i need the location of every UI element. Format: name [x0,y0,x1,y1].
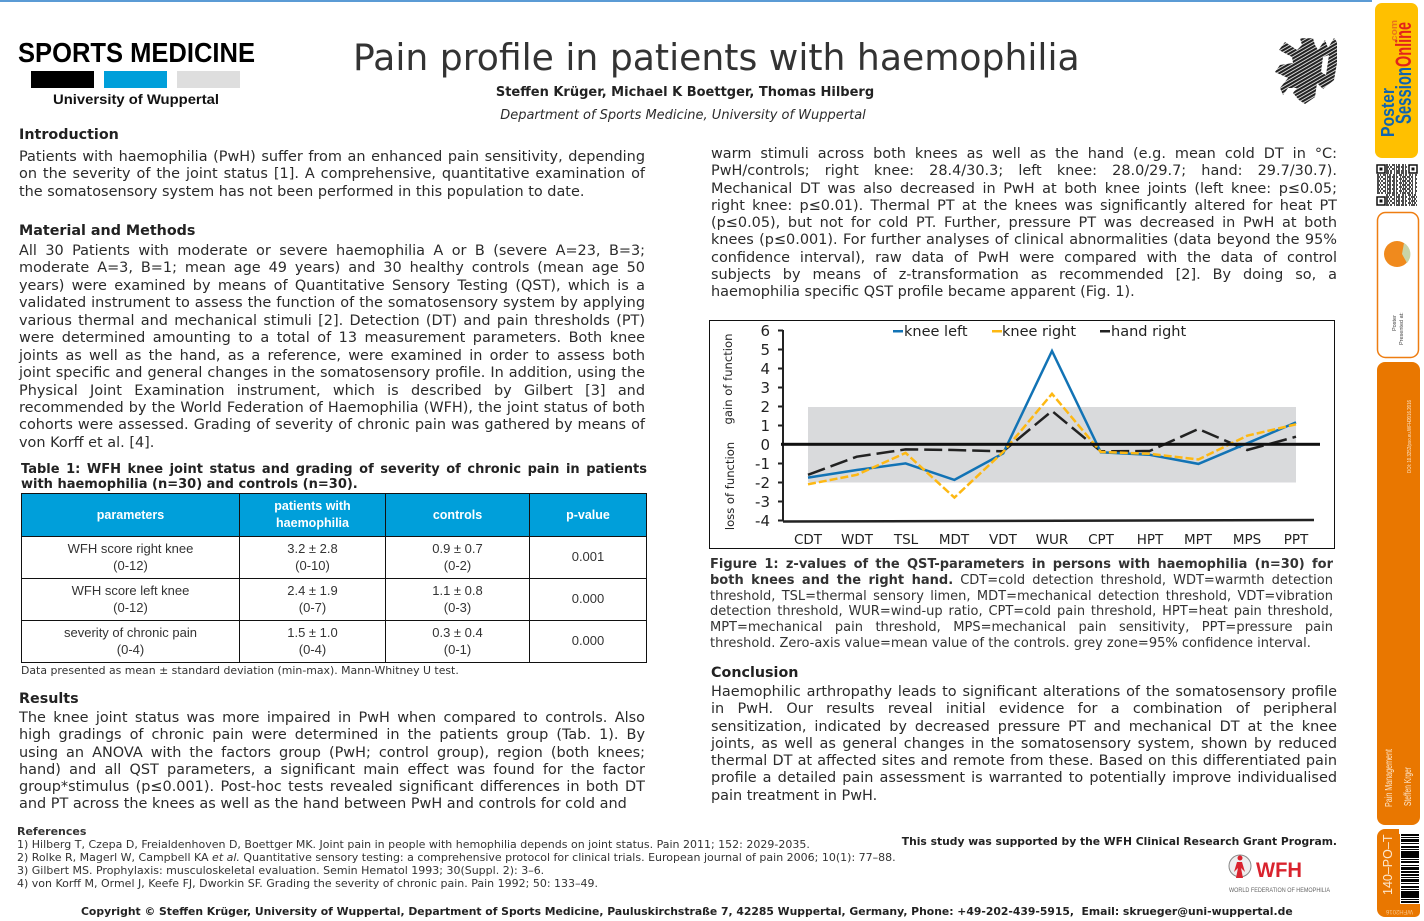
department: Department of Sports Medicine, University of Wuppertal [500,108,866,123]
sidebar: poster id and barcode: 140–PO–T [1381,834,1395,895]
axis titles [721,334,737,530]
table 1: WFH score left knee [72,582,189,598]
funding note: This study was supported by the WFH Clinical Research Grant Program. [902,835,1337,848]
y axis tick labels: 1 [760,417,770,435]
icon: university lion crest [1275,38,1337,104]
table caption: with haemophilia (n=30) and controls (n=30). [21,476,358,492]
table 1: (0-1) [444,642,471,656]
text: results continued: PwH/controls; right knee: 28.4/30.3; left knee: 28.0/29.7; hand: 29.7/30.7). [711,163,1337,179]
table 1: (0-4) [299,642,326,656]
table 1: severity of chronic pain [64,624,197,640]
text: results continued: right knee: p≤0.01). Thermal PT at the knees was significantly altered for heat PT [711,198,1337,214]
doi text: DOI: 10.3252/pso.eu.WFH2016.2016 [1407,400,1413,473]
figure caption: both knees and the right hand. CDT=cold detection threshold, WDT=warmth detection [710,573,1333,588]
x axis labels: CDT [794,532,823,548]
x axis line [783,520,1314,522]
table 1: 1.1 ± 0.8 [432,582,483,598]
text: results continued: haemophilia specific QST profile became apparent (Fig. 1). [711,284,1135,300]
table 1: haemophilia [276,516,349,530]
y axis tick labels: -2 [755,474,770,492]
text: methods: All 30 Patients with moderate or severe haemophilia A or B (severe A=23, B=3; [19,243,645,259]
sidebar: poster id and barcode [1377,829,1420,917]
y axis [778,330,783,521]
y axis tick labels: 4 [760,360,770,378]
x axis labels: VDT [989,532,1018,548]
text: methods: various thermal and mechanical stimuli [2]. Detection (DT) and pain thresholds (PT) [19,313,645,329]
text: results continued: subjects by means of z-transformation as recommended [2]. By doing so, a [711,267,1337,283]
references [17,825,896,890]
table 1: p-value [566,508,610,522]
table 1: 1.5 ± 1.0 [287,624,338,640]
title: Pain profile in patients with haemophilia [353,36,1080,79]
text: conclusion: sensitization, indicated by decreased pressure PT and mechanical DT at the knee [711,719,1337,735]
line chart: z-values of QST parameters [709,320,1335,549]
text: results continued: knees (p≤0.001). For further analyses of clinical abnormalities (data beyond the 95% [711,232,1337,248]
table 1: 0.001 [572,549,604,564]
topic: Pain Management [1384,749,1395,807]
sidebar: presented at panel: Poster [1392,315,1398,331]
text: results continued: Mechanical DT was also decreased in PwH at both knee joints (left knee: p≤0.05; [711,181,1337,197]
axis titles: gain of function [721,334,735,424]
table 1: parameters [97,508,164,522]
text: results: The knee joint status was more impaired in PwH when compared to controls. Also [19,710,645,726]
sidebar: poster session online logo: Poster [1378,88,1398,137]
table caption [21,462,647,492]
text: results: group*stimulus (p≤0.001). Post-hoc tests revealed significant differences in both DT [19,779,645,795]
x axis labels: HPT [1137,532,1164,548]
x axis labels: PPT [1284,532,1309,548]
table 1: (0-12) [113,600,148,614]
text: conclusion: thermal DT at affected sites and remote from these. Based on this differentiated pain [711,753,1337,769]
logo: sports medicine: University of Wuppertal [53,91,219,107]
table 1: (0-12) [113,558,148,572]
heading: material and methods: Material and Methods [19,223,195,239]
x axis labels [794,532,1309,548]
sidebar: presented at panel [1376,212,1420,358]
table caption: Table 1: WFH knee joint status and grading of severity of chronic pain in patients [21,462,647,476]
heading: results: Results [19,691,79,707]
table 1: patients with [274,499,351,513]
y axis tick labels: -4 [755,512,770,530]
table 1 [21,493,647,663]
text: conclusion: Haemophilic arthropathy leads to significant alterations of the somatosensory profile [711,684,1337,700]
y axis tick labels: 6 [760,322,770,340]
x axis labels: MPT [1184,532,1213,548]
text: methods: recommended by the World Federation of Haemophilia (WFH), the joint status of both [19,400,645,416]
author: Steffen Krger [1403,767,1414,806]
table 1: 0.3 ± 0.4 [432,624,483,640]
text: results: hand) and all QST parameters, a significant main effect was found for the factor [19,762,645,778]
text: methods: joints as well as the hand, as a reference, were examined in order to assess both [19,348,645,364]
table 1: (0-4) [117,642,144,656]
text: results continued: (p≤0.05), but not for cold PT. Further, pressure PT was decreased in PwH at both [711,215,1337,231]
figure caption: MPT=mechanical pain threshold, MPS=mechanical pain sensitivity, PPT=pressure pain [710,620,1333,635]
authors: Steffen Krüger, Michael K Boettger, Thomas Hilberg [496,85,874,100]
sidebar: poster session online logo: .com [1389,20,1399,44]
x axis labels: WDT [841,532,874,548]
table 1: 3.2 ± 2.8 [287,540,338,556]
table 1: (0-7) [299,600,326,614]
x axis labels: TSL [893,532,919,548]
text: methods: validated instrument to assess the function of the somatosensory system by applying [19,295,645,311]
references: 2) Rolke R, Magerl W, Campbell KA et al. Quantitative sensory testing: a comprehensive protocol for clinical trials. European journal of pain 2006; 10(1): 77–88. [17,851,896,864]
logo: sports medicine [18,38,255,107]
y axis tick labels: -3 [755,493,770,511]
sidebar: poster id and barcode: WFH2016 [1385,908,1413,914]
x axis labels: CPT [1088,532,1115,548]
top rule [0,0,1372,2]
table 1: 0.000 [572,591,604,606]
table 1: 0.9 ± 0.7 [432,540,483,556]
text: methods: years) were examined by means of Quantitative Sensory Testing (QST), which is a [19,278,645,294]
y axis tick labels [755,322,770,530]
text: conclusion: pain treatment in PwH. [711,788,877,804]
text: conclusion [710,684,1337,804]
y axis tick labels: -1 [755,455,770,473]
text: results continued: confidence interval), raw data of PwH were compared with the data of control [711,250,1337,266]
x axis labels: MDT [939,532,970,548]
y axis tick labels: 3 [760,379,770,397]
sidebar: orange info panel [1377,362,1420,825]
text: results: and PT across the knees as well as the hand between PwH and controls for cold and [19,796,627,812]
series: hand right [808,411,1296,475]
text: introduction: Patients with haemophilia (PwH) suffer from an enhanced pain sensitivity, depending [19,149,645,165]
y axis tick labels: 0 [760,436,770,454]
sidebar: poster session online logo: Session [1391,67,1416,124]
text: conclusion: in PwH. Our results reveal initial evidence for a combination of peripheral [711,701,1337,717]
sidebar: poster session online logo [1375,3,1418,158]
text: methods: moderate A=3, B=1; mean age 49 years) and 30 healthy controls (mean age 50 [19,260,645,276]
logo: WFH: WFH [1256,859,1302,882]
text: introduction [19,149,646,200]
legend: knee right [1002,324,1076,340]
figure caption [710,557,1333,651]
text: conclusion: joints, as well as general changes in the somatosensory system, shown by reduced [711,736,1337,752]
text: methods: von Korff et al. [4]. [19,435,154,451]
legend: hand right [1111,324,1186,340]
zero line [781,443,1320,446]
figure caption: detection threshold, WUR=wind-up ratio, CPT=cold pain threshold, HPT=heat pain threshold, [710,604,1333,619]
copyright: Copyright © Steffen Krüger, University of Wuppertal, Department of Sports Medicine, Pauluskirchstraße 7, 42285 Wuppertal, Germany, Phone: +49-202-439-5915, Email: skrueger@uni-wuppertal.de [81,905,1293,918]
text: results: high gradings of chronic pain were determined in the patients group (Tab. 1). By [19,727,645,743]
text: conclusion: profile a detailed pain assessment is warranted to potentially improve individualised [711,770,1337,786]
text: methods: Physical Joint Examination instrument, which is described by Gilbert [3] and [19,382,645,398]
x axis labels: MPS [1233,532,1261,548]
table footnote: Data presented as mean ± standard deviation (min-max). Mann-Whitney U test. [21,664,459,677]
table 1: (0-3) [444,600,471,614]
text: results: using an ANOVA with the factors group (PwH; control group), region (both knees; [19,745,645,761]
text: results continued: warm stimuli across both knees as well as the hand (e.g. mean cold DT in °C: [711,146,1337,162]
text: methods [18,243,646,451]
table 1: 0.000 [572,633,604,648]
text: results continued [711,146,1337,300]
references: 3) Gilbert MS. Prophylaxis: musculoskeletal evaluation. Semin Hematol 1993; 30(Suppl. 2): 3–6. [17,864,544,877]
y axis tick labels: 5 [760,341,770,359]
table 1: controls [433,508,482,522]
text: methods: were determined amounting to a total of 13 measurement parameters. Both knee [19,330,645,346]
references: 4) von Korff M, Ormel J, Keefe FJ, Dworkin SF. Grading the severity of chronic pain. Pain 1992; 50: 133–49. [17,877,598,890]
series: knee left [808,351,1296,480]
text: methods: joint specific and general changes in the somatosensory profile. In addition, using the [19,365,645,381]
text: introduction: on the severity of the joint status [1]. A comprehensive, quantitative examination of [19,166,645,182]
text: results [18,710,645,812]
figure caption: Figure 1: z-values of the QST-parameters in persons with haemophilia (n=30) for [710,557,1333,572]
QR code [1376,164,1418,206]
figure caption: threshold. Zero-axis value=mean value of the controls. grey zone=95% confidence interval. [710,636,1311,651]
heading: conclusion: Conclusion [711,665,798,681]
text: methods: cohorts were assessed. Grading of severity of chronic pain was gathered by means of [19,417,645,433]
logo: WFH [1228,854,1331,894]
grey confidence zone [808,407,1296,482]
y axis tick labels: 2 [760,398,770,416]
table 1: (0-2) [444,558,471,572]
table 1: WFH score right knee [68,540,193,556]
legend: knee left [904,324,968,340]
references: 1) Hilberg T, Czepa D, Freialdenhoven D, Boettger MK. Joint pain in people with hemophilia depends on joint status. Pain 2011; 152: 2029-2035. [17,838,810,851]
heading: introduction: Introduction [19,127,119,143]
x axis labels: WUR [1036,532,1068,548]
table 1: 2.4 ± 1.9 [287,582,338,598]
legend [893,324,1186,340]
text: introduction: the somatosensory system has not been performed in this population to date. [19,184,584,200]
sidebar: presented at panel: Presented at: [1399,312,1405,345]
figure caption: threshold, TSL=thermal sensory limen, MDT=mechanical detection threshold, VDT=vibration [710,589,1333,604]
series: knee right [808,394,1296,498]
axis titles: loss of function [723,442,737,530]
references: References [17,825,86,838]
table 1: (0-10) [295,558,330,572]
